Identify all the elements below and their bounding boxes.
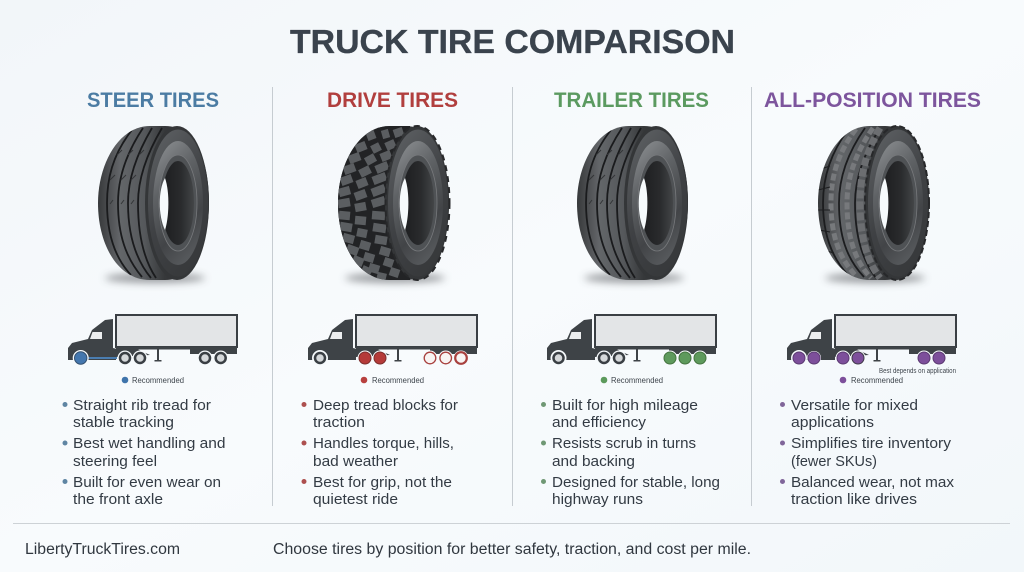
bullet list: trailer: Built for high mileage <box>552 397 698 414</box>
heading: all-position tires: ALL-POSITION TIRES <box>764 88 981 112</box>
bullet list: drive: bad weather <box>313 453 398 470</box>
truck diagram: trailer axles highlighted <box>547 315 716 366</box>
bullet list: drive: Deep tread blocks for <box>313 397 458 414</box>
bullet list: trailer: highway runs <box>552 491 643 508</box>
icon: drive tire <box>338 126 450 283</box>
bullet list: all-position: Balanced wear, not max <box>791 474 955 491</box>
legend: recommended: Recommended <box>372 376 424 385</box>
icon: steer tire <box>98 126 209 283</box>
bullet list: steer: stable tracking <box>73 414 174 431</box>
bullet list: all-position: Simplifies tire inventory <box>791 435 952 452</box>
bullet list: all-position: Versatile for mixed <box>791 397 918 414</box>
icon: trailer tire <box>577 126 688 283</box>
panel: steer tires <box>62 88 237 508</box>
bullet list: steer: the front axle <box>73 491 163 508</box>
truck diagram: drive axles highlighted <box>308 315 477 366</box>
legend: recommended: Recommended <box>132 376 184 385</box>
heading: trailer tires: TRAILER TIRES <box>554 88 709 112</box>
bullet list: trailer: and backing <box>552 453 635 470</box>
bullet list: all-position <box>780 397 955 508</box>
title: TRUCK TIRE COMPARISON <box>290 23 735 60</box>
bullet list: trailer: Designed for stable, long <box>552 474 720 491</box>
note: best depends on application: Best depends on application <box>879 368 956 375</box>
heading: drive tires: DRIVE TIRES <box>327 88 458 112</box>
legend: recommended: Recommended <box>851 376 903 385</box>
bullet list: drive <box>302 397 458 508</box>
bullet list: steer <box>62 397 226 508</box>
panel: all-position tires <box>764 88 981 508</box>
bullet list: steer: Built for even wear on <box>73 474 221 491</box>
truck diagram: steer axle highlighted <box>68 315 237 366</box>
bullet list: steer: Best wet handling and <box>73 435 226 452</box>
footer: tagline: Choose tires by position for better safety, traction, and cost per mile. <box>273 541 751 558</box>
bullet list: trailer <box>541 397 720 508</box>
heading: steer tires: STEER TIRES <box>87 88 219 112</box>
bullet list: steer: steering feel <box>73 453 157 470</box>
bullet list: drive: Handles torque, hills, <box>313 435 454 452</box>
bullet list: drive: traction <box>313 414 365 431</box>
panel: trailer tires <box>541 88 720 508</box>
bullet list: steer: Straight rib tread for <box>73 397 211 414</box>
bullet list: trailer: Resists scrub in turns <box>552 435 696 452</box>
truck diagram: all axles highlighted <box>787 315 956 366</box>
bullet list: trailer: and efficiency <box>552 414 647 431</box>
footer: website: LibertyTruckTires.com <box>25 541 180 558</box>
bullet list: drive: Best for grip, not the <box>313 474 452 491</box>
legend: recommended: Recommended <box>611 376 663 385</box>
panel: drive tires <box>302 88 477 508</box>
bullet list: all-position: (fewer SKUs) <box>791 453 877 470</box>
icon: all-position tire <box>818 126 929 283</box>
bullet list: all-position: applications <box>791 414 874 431</box>
bullet list: all-position: traction like drives <box>791 491 917 508</box>
bullet list: drive: quietest ride <box>313 491 398 508</box>
